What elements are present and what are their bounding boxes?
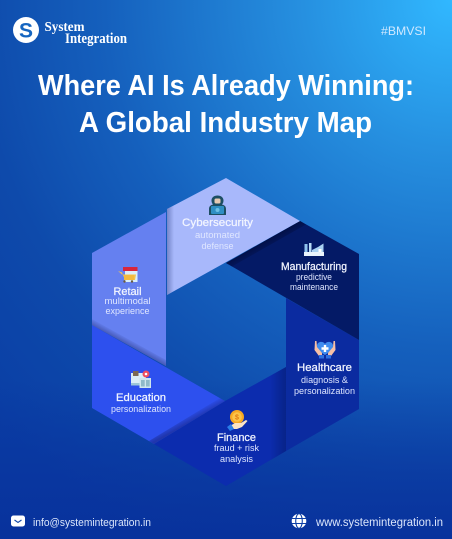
panel: education — [92, 325, 225, 444]
icon: globe — [292, 514, 306, 528]
label: education — [111, 392, 171, 414]
logo: System Integration: S — [19, 20, 33, 42]
label: healthcare: Healthcare — [297, 362, 352, 374]
label: education: personalization — [111, 404, 171, 414]
footer: website: www.systemintegration.in — [315, 517, 443, 529]
label: finance — [214, 432, 259, 464]
panel: cybersecurity — [167, 178, 300, 295]
label: healthcare — [294, 362, 355, 396]
hexagon diagram — [92, 178, 359, 486]
label: education: Education — [116, 392, 166, 404]
label: retail: multimodal — [104, 296, 150, 306]
icon: coin in hand: $ — [235, 414, 239, 422]
icon: factory — [304, 243, 324, 256]
label: cybersecurity: defense — [202, 241, 234, 251]
panel: finance — [154, 367, 286, 486]
label: manufacturing: maintenance — [290, 282, 338, 292]
logo: System Integration — [13, 17, 127, 47]
label: cybersecurity — [182, 217, 254, 251]
footer: email: info@systemintegration.in — [33, 517, 151, 529]
label: finance: fraud + risk — [214, 443, 259, 453]
label: healthcare: personalization — [294, 386, 355, 396]
label: healthcare: diagnosis & — [301, 375, 348, 385]
icon: shopping cart and store — [118, 267, 138, 283]
label: cybersecurity: automated — [195, 230, 240, 240]
label: finance: analysis — [220, 454, 254, 464]
label: manufacturing: predictive — [296, 272, 332, 282]
label: manufacturing: Manufacturing — [281, 261, 347, 273]
icon: hooded hacker — [209, 196, 226, 215]
icon: books and badge — [131, 370, 151, 388]
footer: website — [292, 514, 443, 529]
logo: System Integration: System — [44, 20, 85, 35]
panel: retail — [92, 212, 166, 366]
title: Where AI Is Already Winning: — [38, 70, 414, 102]
icon: heart in hands — [314, 341, 336, 358]
label: finance: Finance — [217, 432, 256, 444]
logo: System Integration: Integration — [65, 31, 127, 47]
label: manufacturing — [281, 261, 347, 292]
panel: healthcare — [286, 298, 359, 451]
hashtag: #BMVSI — [381, 26, 426, 38]
label: retail — [104, 286, 150, 316]
title: A Global Industry Map — [79, 107, 372, 139]
label: cybersecurity: Cybersecurity — [182, 217, 254, 229]
label: retail: Retail — [114, 286, 142, 298]
panel: manufacturing — [226, 221, 359, 340]
label: retail: experience — [106, 306, 150, 316]
title — [38, 70, 414, 139]
icon: envelope — [11, 516, 25, 526]
